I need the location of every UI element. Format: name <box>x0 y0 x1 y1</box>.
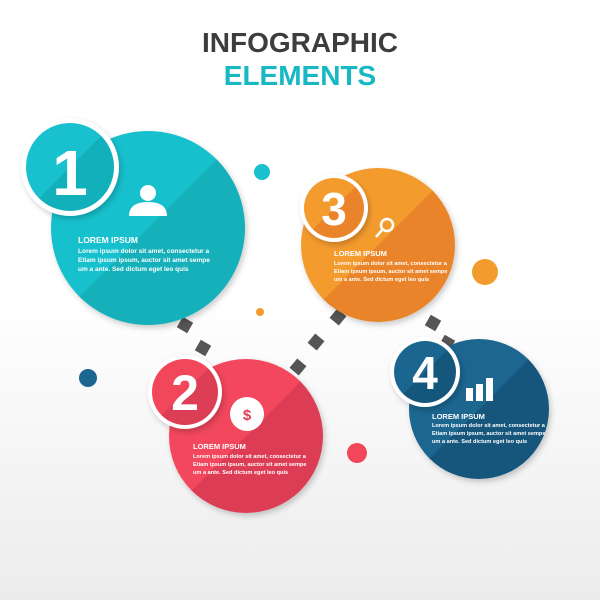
decorative dots <box>79 164 498 463</box>
number badge 1: 1 <box>52 137 88 209</box>
number badge 2: 2 <box>171 365 199 421</box>
panel 4 <box>390 337 549 479</box>
text 3: um a ante. Sed dictum eget leo quis <box>334 277 429 283</box>
text 2 <box>193 442 307 476</box>
panel 2 <box>148 355 323 513</box>
icon: dollar: $ <box>243 407 252 424</box>
title: ELEMENTS <box>224 60 376 91</box>
text 2: um a ante. Sed dictum eget leo quis <box>193 470 288 476</box>
text 2: LOREM IPSUM <box>193 442 246 451</box>
text 3 <box>334 249 448 283</box>
panel 3 <box>300 168 455 322</box>
number badge 2 <box>148 355 222 429</box>
number badge 1 <box>21 118 119 216</box>
connector dashes <box>177 309 455 375</box>
title <box>202 27 398 91</box>
icon: bar chart <box>466 378 493 401</box>
text 2: Etiam ipsum ipsum, auctor sit amet sempe <box>193 462 306 468</box>
number badge 4 <box>390 337 460 407</box>
icon: magnifier <box>376 219 393 237</box>
text 3: Etiam ipsum ipsum, auctor sit amet sempe <box>334 269 447 275</box>
text 4 <box>432 412 546 445</box>
number badge 3 <box>300 174 368 242</box>
text 2: Lorem ipsum dolor sit amet, consectetur a <box>193 454 307 460</box>
text 4: um a ante. Sed dictum eget leo quis <box>432 439 527 445</box>
title: INFOGRAPHIC <box>202 27 398 58</box>
text 1: um a ante. Sed dictum eget leo quis <box>78 266 189 273</box>
text 3: Lorem ipsum dolor sit amet, consectetur a <box>334 261 448 267</box>
text 1 <box>78 235 210 273</box>
text 4: Etiam ipsum ipsum, auctor sit amet sempe <box>432 431 545 437</box>
text 1: Etiam ipsum ipsum, auctor sit amet sempe <box>78 257 210 264</box>
number badge 3: 3 <box>321 183 347 235</box>
text 1: LOREM IPSUM <box>78 235 138 245</box>
text 4: Lorem ipsum dolor sit amet, consectetur a <box>432 423 546 429</box>
icon: person <box>129 185 167 216</box>
number badge 4: 4 <box>412 347 438 399</box>
text 3: LOREM IPSUM <box>334 249 387 258</box>
text 4: LOREM IPSUM <box>432 412 485 421</box>
icon: dollar <box>230 397 264 431</box>
panel 1 <box>21 118 245 325</box>
text 1: Lorem ipsum dolor sit amet, consectetur a <box>78 248 209 255</box>
